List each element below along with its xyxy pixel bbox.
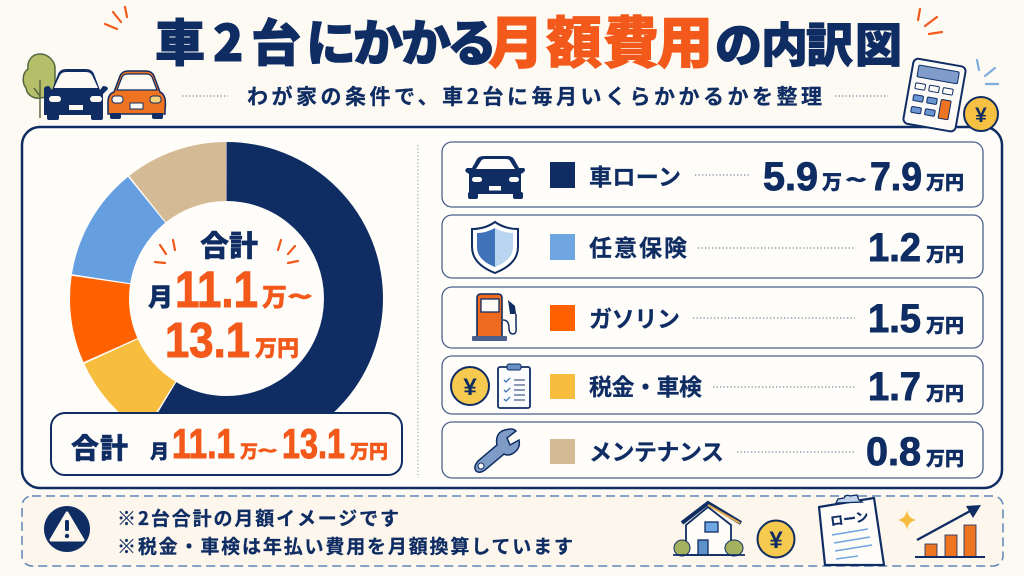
total pill [51,413,402,475]
total pill: 11.1 [172,420,235,467]
row: gasoline: ガソリン [589,300,680,334]
icon: right sparkle rays [918,9,942,34]
icon: yen coin bottom [758,520,794,558]
icon: orange car [108,71,165,119]
title: の内訳図 [715,7,902,76]
footnote text [117,504,573,559]
row: insurance: 万円 [926,240,964,267]
subtitle: わが家の条件で、車2台に毎月いくらかかるかを整理 [247,81,822,111]
icon: left sparkle rays [105,7,127,29]
icon: tree [23,54,55,118]
icon: house [673,503,745,556]
row: car loan: 車ローン [589,158,681,192]
divider [417,145,419,478]
donut centre total: 13.1 [165,314,250,368]
row: car loan: 万円 [926,168,964,195]
footnote text: ※2台合計の月額イメージです [117,504,399,531]
title: 車2台にかかる [155,4,497,76]
icon: fuel pump [472,294,516,341]
icon: yen coin top: ¥ [975,104,987,127]
row: car loan: 万 [822,166,842,195]
total pill: 万 [240,438,258,464]
donut centre total [148,223,313,368]
main panel [22,127,1002,488]
donut centre total: 万 [262,278,287,314]
icon: car [465,156,525,199]
icon: sparkle [898,510,916,530]
row: gasoline [442,287,983,348]
donut centre total: 合計 [200,223,258,265]
row: car loan: ~ [845,163,867,195]
row: maintenance: 0.8 [866,430,921,474]
icon: warning [44,506,90,552]
icon: loan clipboard: ローン [829,506,870,530]
icon: yen coin top [964,97,998,131]
title: 月額費用 [488,0,713,80]
row: insurance [442,215,983,278]
row: maintenance: 万円 [926,444,964,471]
panel: footnote [22,496,1003,566]
total pill: 13.1 [282,420,345,467]
total pill: ~ [257,435,278,464]
row: car loan: 7.9 [870,155,922,199]
row: gasoline: 1.5 [868,297,921,341]
row: tax and inspection: 1.7 [868,365,921,409]
donut centre total: 万円 [255,331,299,363]
donut centre total: 11.1 [175,261,258,318]
total pill: 月 [150,437,169,464]
row: tax and inspection [442,356,983,414]
row: gasoline: 万円 [926,311,964,338]
icon: yen coin [451,367,489,405]
icon: navy car [44,69,108,120]
icon: yen coin bottom: ¥ [769,527,783,554]
icon: blue sparkle rays [977,60,998,84]
footnote text: ※税金・車検は年払い費用を月額換算しています [117,532,573,559]
total pill: 万円 [350,437,388,464]
icon: loan clipboard [819,495,884,565]
row: car loan: 5.9 [763,155,818,199]
icon: rising bar chart [915,505,985,557]
icon: checklist [498,364,530,408]
icon: calculator [903,58,966,132]
row: car loan [442,142,983,207]
donut centre total: 月 [148,278,173,314]
row: maintenance: メンテナンス [589,433,724,467]
row: tax and inspection: 税金・車検 [589,368,702,402]
total pill: 合計 [71,427,128,467]
row: tax and inspection: 万円 [926,379,964,406]
donut chart [100,172,354,426]
row: insurance: 1.2 [868,226,921,270]
row: insurance: 任意保険 [589,229,687,263]
title [155,0,902,80]
icon: shield [472,222,518,273]
icon: yen coin: ¥ [463,374,477,401]
icon: wrench [475,429,519,472]
donut centre total: ~ [287,277,313,314]
row: maintenance [442,422,983,478]
